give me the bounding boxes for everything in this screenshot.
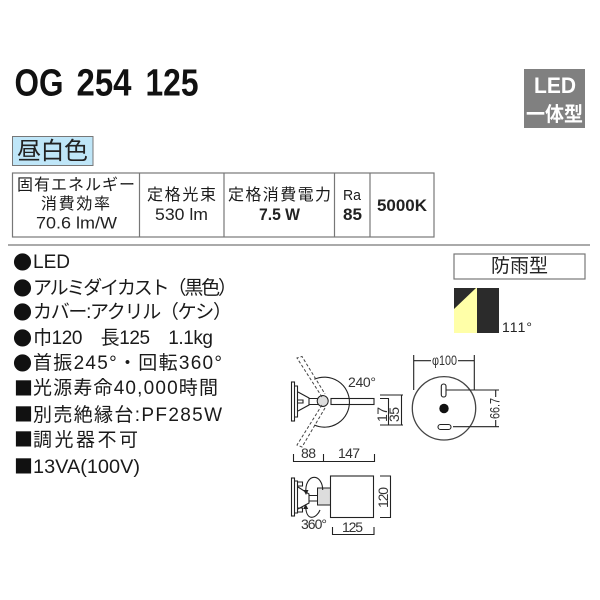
cell: efficiency: 70.6 lm/W	[36, 214, 117, 232]
cell: Ra: 85	[343, 205, 362, 224]
cell: efficiency: 固有エネルギー	[17, 176, 135, 194]
spec table	[12, 173, 434, 237]
cell: efficiency: 消費効率	[41, 195, 110, 213]
height dimensions	[374, 395, 403, 425]
height dimensions: 35	[386, 407, 402, 422]
label: rainproof: 防雨型	[491, 255, 548, 277]
height dimension: 120	[375, 487, 391, 508]
swivel joint	[317, 396, 328, 406]
feature list: ●	[13, 349, 32, 376]
height dimensions: 17	[374, 407, 390, 422]
title: model number: OG	[14, 62, 64, 104]
width dimension	[294, 445, 374, 462]
width dimension: 147	[338, 445, 360, 461]
title: model number: 254	[76, 62, 132, 104]
title: model number	[14, 62, 198, 104]
feature list: ■	[14, 425, 33, 452]
feature list: ●	[13, 298, 32, 325]
length dimension: 125	[342, 519, 363, 535]
feature list: ●	[13, 274, 32, 301]
cell: colour temperature: 5000K	[377, 196, 428, 215]
cell: efficiency	[17, 176, 135, 232]
feature list: ■	[14, 374, 33, 401]
beam angle value: 111°	[502, 319, 532, 335]
diagram: front view	[412, 352, 502, 440]
feature list: 巾120 長125 1.1kg	[33, 327, 213, 349]
diameter dimension: φ100	[432, 352, 457, 368]
feature list: カバー:アクリル（ケシ）	[33, 301, 232, 323]
badge: LED integrated: 一体型	[526, 103, 583, 126]
angle label: 240°	[348, 374, 376, 390]
feature list: LED	[33, 252, 70, 273]
cell: rated power: 7.5 W	[259, 205, 301, 224]
icon: beam angle	[454, 288, 499, 333]
feature list: 別売絶縁台:PF285W	[33, 404, 222, 426]
feature list	[13, 248, 237, 479]
label: rainproof	[454, 254, 585, 279]
cell: Ra: Ra	[343, 187, 362, 204]
feature list: アルミダイカスト（黒色）	[33, 277, 237, 299]
wall plate and base	[292, 382, 318, 421]
mounting slots	[438, 384, 451, 430]
feature list: ■	[14, 452, 33, 479]
feature list: ●	[13, 324, 32, 351]
feature list: ●	[13, 248, 32, 275]
cell: rated luminous flux: 定格光束	[147, 186, 216, 204]
width dimension: 88	[301, 445, 316, 461]
badge: daylight white colour: 昼白色	[17, 138, 88, 165]
dashed positions	[297, 356, 325, 447]
rotation label: 360°	[301, 516, 327, 532]
cell: Ra	[343, 187, 362, 224]
badge: LED integrated	[524, 69, 585, 128]
wall plate and base	[292, 478, 317, 516]
swivel arc	[314, 377, 349, 427]
rotation arrows	[303, 477, 323, 517]
cell: rated luminous flux	[147, 186, 216, 224]
feature list: 光源寿命40,000時間	[33, 377, 218, 399]
feature list: 首振245°・回転360°	[33, 352, 222, 374]
round plate	[412, 377, 476, 440]
feature list: ■	[14, 400, 33, 427]
feature list: 調光器不可	[33, 429, 138, 451]
swivel joint	[318, 488, 330, 505]
badge: LED integrated: LED	[534, 73, 576, 98]
centre hole	[439, 404, 449, 413]
cell: rated luminous flux: 530 lm	[155, 205, 208, 224]
head box	[330, 476, 374, 518]
title: model number: 125	[146, 62, 198, 104]
arm tube	[331, 398, 374, 404]
cell: rated power	[228, 186, 331, 224]
hole spacing dimension: 66.7	[486, 398, 502, 419]
feature list: 13VA(100V)	[33, 457, 140, 478]
diagram: top view	[292, 476, 391, 535]
cell: rated power: 定格消費電力	[228, 186, 331, 204]
diagram: side view	[292, 356, 403, 462]
